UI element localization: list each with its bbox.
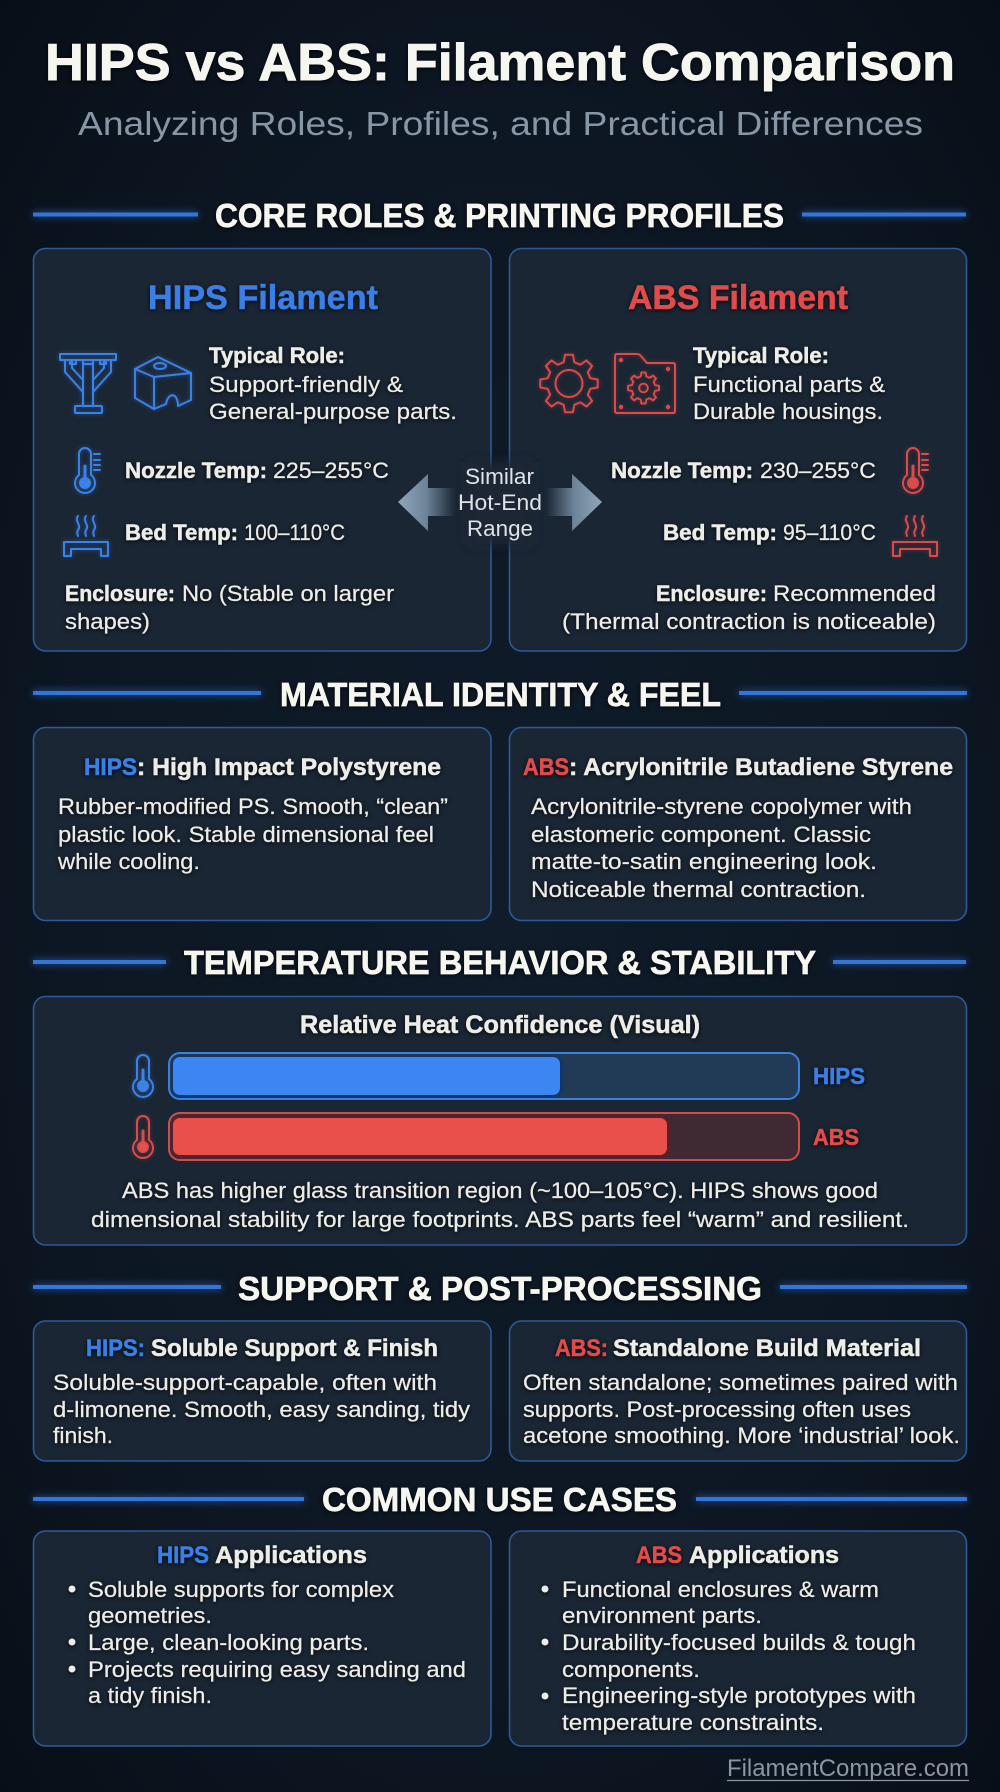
- icon: blue heated bed: [64, 516, 108, 556]
- text: HIPS enclosure: [65, 581, 394, 634]
- text: temperature note: dimensional stability for large footprints. ABS parts feel “warm” and resilient.: [91, 1207, 909, 1232]
- text: HIPS support body: finish.: [53, 1423, 113, 1448]
- icon: blue thermometer: [75, 448, 100, 493]
- list: ABS applications: temperature constraints.: [562, 1710, 824, 1735]
- text: ABS identity body: elastomeric component. Classic: [531, 822, 871, 847]
- heading: HIPS applications: [157, 1542, 367, 1569]
- list: ABS applications: components.: [562, 1657, 700, 1682]
- panel: HIPS support: [34, 1321, 491, 1461]
- panel: HIPS filament profile: [34, 248, 491, 651]
- list: ABS applications: Engineering-style prototypes with: [562, 1683, 916, 1708]
- text: HIPS nozzle temp: Nozzle Temp:: [125, 458, 267, 483]
- panel: HIPS applications: [34, 1531, 491, 1746]
- text: ABS identity body: Noticeable thermal contraction.: [531, 877, 866, 902]
- list: HIPS applications: Soluble supports for complex: [88, 1577, 394, 1602]
- bar: ABS: [169, 1113, 799, 1160]
- text: ABS enclosure: (Thermal contraction is noticeable): [562, 609, 936, 634]
- text: ABS typical role: [693, 343, 885, 424]
- heading: HIPS applications: Applications: [215, 1542, 367, 1569]
- heading: ABS Filament: ABS Filament: [628, 279, 848, 317]
- text: ABS support body: acetone smoothing. More ‘industrial’ look.: [523, 1423, 960, 1448]
- text: HIPS identity body: plastic look. Stable dimensional feel: [58, 822, 434, 847]
- text: HIPS typical role: General-purpose parts.: [209, 399, 457, 424]
- list: HIPS applications: a tidy finish.: [88, 1683, 212, 1708]
- list: ABS applications: Durability-focused builds & tough: [562, 1630, 916, 1655]
- section heading: core roles: CORE ROLES & PRINTING PROFILES: [215, 197, 784, 234]
- heading: HIPS High Impact Polystyrene: : High Impact Polystyrene: [137, 754, 441, 781]
- section heading: material identity: MATERIAL IDENTITY & FEEL: [280, 676, 721, 713]
- heading: HIPS soluble support: HIPS:: [86, 1335, 145, 1362]
- panel: ABS support: [510, 1321, 966, 1461]
- text: HIPS support body: [53, 1370, 470, 1448]
- text: HIPS support body: Soluble-support-capable, often with: [53, 1370, 437, 1395]
- text: HIPS identity body: [57, 794, 448, 874]
- text: HIPS bed temp: Bed Temp:: [125, 520, 238, 545]
- chart title: Relative Heat Confidence (Visual): [300, 1011, 700, 1039]
- text: HIPS typical role: Typical Role:: [209, 343, 345, 368]
- text: ABS identity body: matte-to-satin engineering look.: [531, 849, 877, 874]
- heading: HIPS High Impact Polystyrene: HIPS: [84, 754, 137, 781]
- text: ABS identity body: Acrylonitrile-styrene copolymer with: [531, 794, 912, 819]
- list: HIPS applications: Projects requiring easy sanding and: [88, 1657, 466, 1682]
- heading: ABS Acrylonitrile Butadiene Styrene: : Acrylonitrile Butadiene Styrene: [569, 754, 953, 781]
- panel: HIPS identity: [34, 728, 491, 920]
- icon: large gear: [540, 355, 598, 412]
- center callout: similar hot-end range: [398, 462, 602, 544]
- text: ABS support body: supports. Post-processing often uses: [523, 1397, 911, 1422]
- text: HIPS support body: d-limonene. Smooth, easy sanding, tidy: [53, 1397, 470, 1422]
- heading: HIPS Filament: HIPS Filament: [148, 279, 378, 317]
- text: similar hot-end range: Similar: [465, 464, 534, 489]
- section heading: common use cases: COMMON USE CASES: [322, 1481, 677, 1518]
- text: ABS nozzle temp: Nozzle Temp:: [611, 458, 753, 483]
- heading: HIPS applications: HIPS: [157, 1542, 209, 1569]
- heading: ABS standalone material: ABS:: [555, 1335, 608, 1362]
- panel: ABS identity: [510, 728, 966, 920]
- bar: HIPS: [169, 1053, 799, 1099]
- list: ABS applications: Functional enclosures & warm: [562, 1577, 879, 1602]
- icon: red chart thermometer: [133, 1116, 153, 1158]
- text: similar hot-end range: Hot-End: [458, 490, 542, 515]
- text: ABS bed temp: [663, 520, 876, 545]
- text: temperature note: ABS has higher glass transition region (~100–105°C). HIPS shows good: [122, 1178, 878, 1203]
- text: ABS enclosure: Enclosure:: [656, 581, 767, 606]
- title: HIPS vs ABS: Filament Comparison: [45, 34, 955, 92]
- text: ABS typical role: Typical Role:: [693, 343, 829, 368]
- section heading: temperature behavior: TEMPERATURE BEHAVIOR & STABILITY: [184, 944, 816, 981]
- text: HIPS nozzle temp: 225–255°C: [273, 458, 389, 483]
- text: HIPS enclosure: shapes): [65, 609, 150, 634]
- text: ABS support body: [523, 1370, 960, 1448]
- panel: ABS applications: [510, 1531, 966, 1746]
- list: HIPS applications: Large, clean-looking parts.: [88, 1630, 369, 1655]
- list: HIPS applications: [68, 1577, 466, 1708]
- text: ABS bed temp: 95–110°C: [783, 520, 876, 545]
- heading: ABS applications: Applications: [689, 1542, 839, 1569]
- bar label: ABS: ABS: [813, 1124, 859, 1150]
- text: ABS typical role: Functional parts &: [693, 372, 885, 397]
- text: HIPS identity body: while cooling.: [57, 849, 200, 874]
- text: HIPS enclosure: Enclosure:: [65, 581, 175, 606]
- icon: red thermometer: [903, 448, 928, 493]
- footer: site credit: FilamentCompare.com: [727, 1755, 969, 1782]
- text: similar hot-end range: [458, 464, 542, 541]
- heading: ABS standalone material: Standalone Build Material: [613, 1335, 921, 1362]
- list: HIPS applications: geometries.: [88, 1603, 212, 1628]
- heading: HIPS soluble support: Soluble Support & Finish: [151, 1335, 438, 1362]
- text: HIPS enclosure: No (Stable on larger: [182, 581, 394, 606]
- text: HIPS typical role: Support-friendly &: [209, 372, 403, 397]
- text: ABS identity body: [531, 794, 912, 902]
- heading: ABS Acrylonitrile Butadiene Styrene: ABS: [523, 754, 569, 781]
- text: ABS nozzle temp: 230–255°C: [760, 458, 876, 483]
- panel: ABS filament profile: [510, 248, 966, 651]
- text: similar hot-end range: Range: [467, 516, 533, 541]
- text: HIPS bed temp: [125, 520, 345, 545]
- icon: blue chart thermometer: [133, 1055, 153, 1097]
- text: ABS enclosure: [562, 581, 936, 634]
- text: ABS typical role: Durable housings.: [693, 399, 883, 424]
- text: HIPS nozzle temp: [125, 458, 389, 483]
- panel: temperature chart: [34, 996, 966, 1245]
- icon: support structure: [60, 354, 116, 413]
- icon: printed block: [135, 357, 191, 409]
- text: ABS bed temp: Bed Temp:: [663, 520, 777, 545]
- text: ABS nozzle temp: [611, 458, 876, 483]
- icon: red heated bed: [893, 516, 937, 556]
- subtitle: Analyzing Roles, Profiles, and Practical Differences: [78, 105, 923, 142]
- text: HIPS bed temp: 100–110°C: [244, 520, 345, 545]
- arrow: left: [398, 474, 455, 531]
- list: ABS applications: environment parts.: [562, 1603, 762, 1628]
- text: HIPS typical role: [209, 343, 457, 424]
- text: HIPS identity body: Rubber-modified PS. Smooth, “clean”: [58, 794, 448, 819]
- bar label: HIPS: HIPS: [813, 1063, 865, 1089]
- section heading: support and post-processing: SUPPORT & POST-PROCESSING: [238, 1270, 762, 1307]
- heading: ABS applications: ABS: [636, 1542, 682, 1569]
- text: temperature note: [91, 1178, 909, 1232]
- text: ABS enclosure: Recommended: [773, 581, 936, 606]
- arrow: right: [546, 474, 602, 531]
- list: ABS applications: [542, 1577, 916, 1735]
- icon: housing with gear: [615, 354, 675, 413]
- text: ABS support body: Often standalone; sometimes paired with: [523, 1370, 958, 1395]
